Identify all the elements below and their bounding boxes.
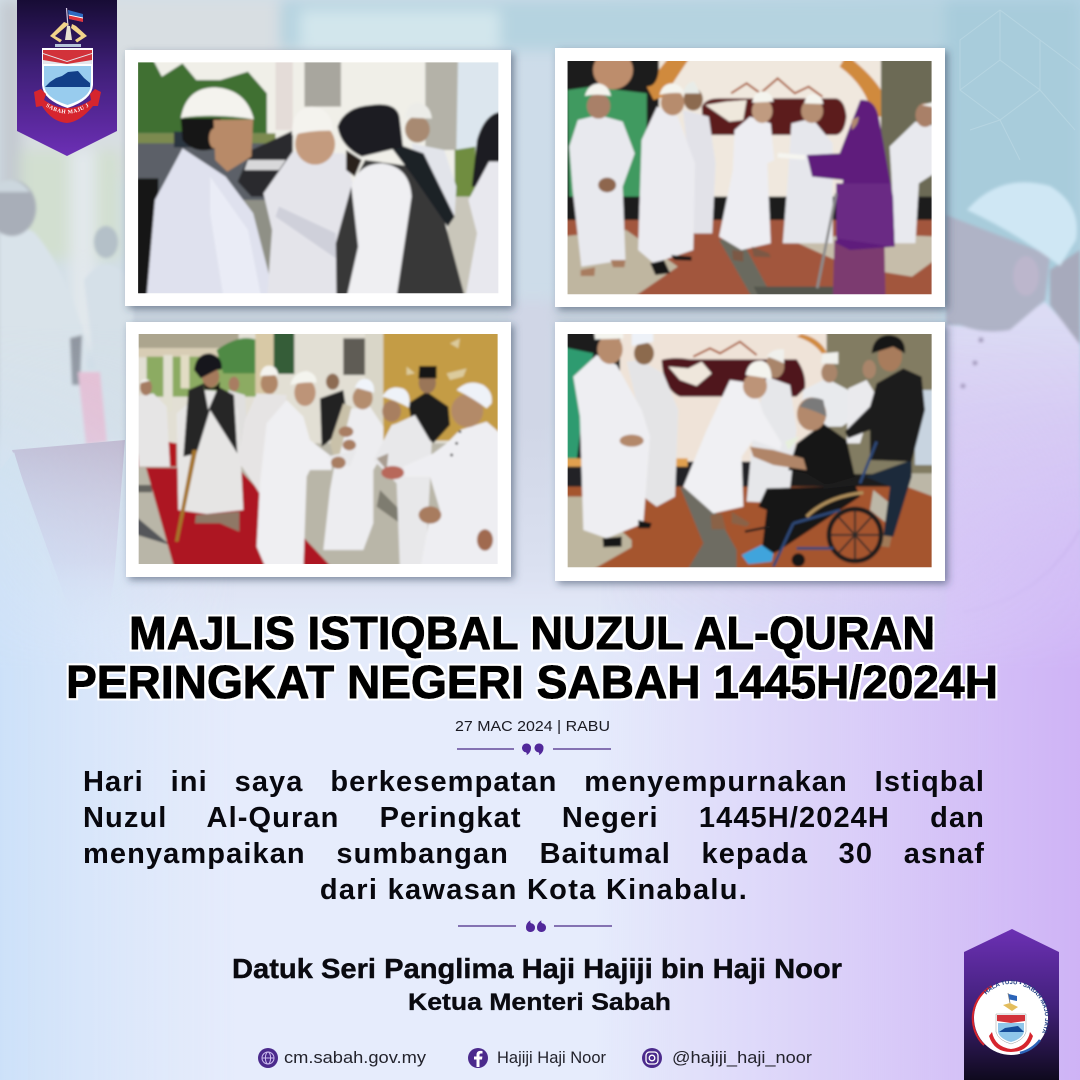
man behind bowing figure xyxy=(747,349,797,503)
icon: red ribbon with motto xyxy=(34,89,101,123)
title xyxy=(66,607,998,708)
icon: facebook xyxy=(468,1048,488,1068)
photo 2 image xyxy=(561,51,940,300)
icon: wheelchair xyxy=(745,442,881,567)
man behind, rear xyxy=(226,376,246,447)
icon: gold hand emblem xyxy=(50,22,87,47)
title: MAJLIS ISTIQBAL NUZUL AL-QURAN xyxy=(129,607,935,659)
quote body text: dari kawasan Kota Kinabalu. xyxy=(320,874,748,906)
man with turban and checked vest xyxy=(336,104,466,300)
man left in white xyxy=(573,330,652,547)
man third behind xyxy=(240,364,286,494)
man in white at right edge xyxy=(465,160,498,294)
top-left badge with Sabah crest xyxy=(17,0,117,156)
quote body text: Nuzul Al-Quran Peringkat Negeri 1445H/2024H dan xyxy=(83,802,985,834)
contact: facebook: Hajiji Haji Noor xyxy=(497,1048,606,1067)
man in black, rear xyxy=(320,374,348,447)
man with cap, right foreground xyxy=(381,383,504,571)
date line: 27 MAC 2024 | RABU xyxy=(455,718,610,735)
man at rear, second from left xyxy=(627,332,678,507)
man in white, centre xyxy=(262,129,352,294)
man D, chief minister xyxy=(719,91,774,262)
man in black, standing behind xyxy=(408,366,450,443)
man in turban and vest xyxy=(175,353,243,542)
icon: globe xyxy=(258,1048,278,1068)
man B xyxy=(638,83,695,275)
photo 1 image xyxy=(131,57,506,300)
man in wheelchair xyxy=(742,397,881,567)
photo 1: leaders greeting outside the mosque xyxy=(125,50,511,306)
icon: crest shield xyxy=(42,48,93,108)
man F at right xyxy=(888,100,932,244)
man far left xyxy=(133,379,170,467)
quote body text: menyampaikan sumbangan Baitumal kepada 30 asnaf xyxy=(83,838,985,870)
man C behind xyxy=(683,82,716,233)
photo 4 image xyxy=(561,327,938,574)
logo: round emblem xyxy=(972,980,1050,1055)
man at rear right xyxy=(405,103,456,217)
logo: round emblem: HALA TUJU • SABAH MAJU JAYA xyxy=(984,980,1050,1033)
man in white, left foreground xyxy=(146,87,276,300)
men at rear right xyxy=(800,352,876,443)
icon: instagram xyxy=(642,1048,662,1068)
photo 2: aid presented to woman in purple xyxy=(555,48,945,307)
quote body text: Hari ini saya berkesempatan menyempurnakan Istiqbal xyxy=(83,766,985,798)
man bowing, chief minister xyxy=(683,361,782,529)
photo 3: greeting line on red carpet xyxy=(126,322,511,577)
man E in rear xyxy=(783,94,833,243)
contact: instagram: @hajiji_haji_noor xyxy=(672,1048,812,1067)
man A with spectacles xyxy=(569,83,635,276)
man in black standing behind wheelchair xyxy=(845,335,925,547)
contact: website: cm.sabah.gov.my xyxy=(284,1048,427,1067)
background figure: large man with white cap xyxy=(945,182,1080,1000)
photo 4: aid presented to man in wheelchair xyxy=(555,322,945,581)
divider with quotation marks, bottom xyxy=(458,920,612,932)
title: PERINGKAT NEGERI SABAH 1445H/2024H xyxy=(66,656,998,708)
bottom-right badge with round logo xyxy=(964,929,1059,1080)
man in white main figure shaking hands xyxy=(257,371,357,570)
man with cap, foreground smiling xyxy=(323,379,383,550)
photo 3 image xyxy=(132,327,504,571)
speaker name: Datuk Seri Panglima Haji Hajiji bin Haji Noor xyxy=(232,953,842,984)
divider with quotation marks, top xyxy=(457,743,611,755)
icon: Sabah flag xyxy=(66,8,83,27)
speaker title: Ketua Menteri Sabah xyxy=(408,989,671,1016)
man with cap greeting, middle xyxy=(373,387,432,571)
woman in purple with stick xyxy=(777,100,895,300)
